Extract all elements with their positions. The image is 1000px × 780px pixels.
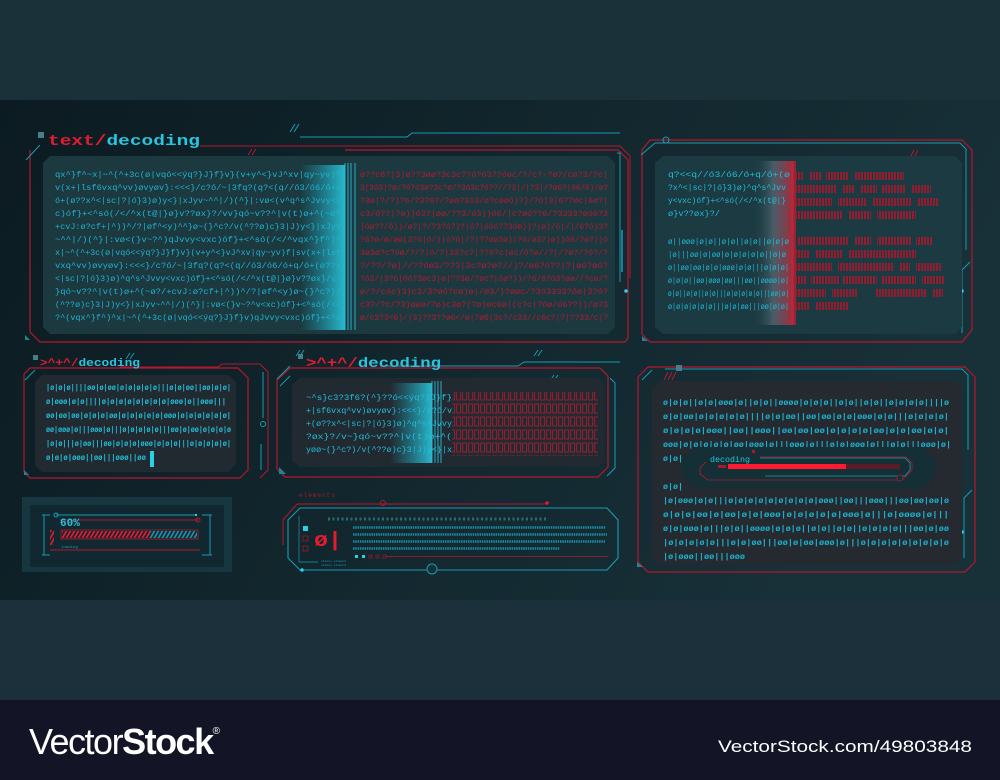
background top band [0, 0, 1000, 100]
cyan text: ø|ø|ø||øø|øøø|øø|||øø||øøøø|ø| [668, 276, 789, 286]
inner screen [43, 156, 615, 334]
binary rows: øø|øø|øø|ø|ø|ø|øø|ø|ø|ø|ø|ø|øøø|ø|ø|ø|ø|ø|ø| [46, 411, 231, 421]
binary rows: ø|øøø|ø|ø||||ø|ø|ø|ø|ø|ø|ø|ø|øøø|ø||øøø||| [46, 397, 226, 407]
binary rows: |ø|øøø|ø|ø|||ø|ø|ø|ø|ø|ø|ø|ø|ø|øøø||øø|||øøø|||øø|øø|øø|ø [663, 496, 949, 506]
background main area [0, 100, 1000, 600]
binary rows [46, 383, 231, 463]
panel: large text decoding [25, 124, 630, 342]
url: VectorStock.com/49803848 [718, 737, 972, 756]
panel: top right decoding [641, 137, 972, 342]
cyan text: +(ø??x^<|sc|?|ó}3)ø)^q^s^Jvvy [306, 420, 452, 429]
cyan text [306, 394, 452, 455]
big 01: ø| [314, 530, 342, 553]
percent label: 60% [60, 518, 80, 530]
red text rows: ?6?ø/ø/øø(3?ó|ó/)|ó?ó|/?|??øø3ø)|?ó/ø3?|ø))ó6/?ø?|)ó [360, 235, 608, 245]
gradient overlay [390, 383, 432, 463]
binary rows: ø|ø|øøø|ø|||ø|ø||øøøø|ø|ø|ø||ø|ø||ø|ø||ø|ø|ø|ø|||øø|ø|øø [663, 524, 949, 534]
inner screen [652, 381, 962, 565]
red text rows: |óø??/ó))/ø?|?/?3?ó?)?|ó?|óóó??3óø))?|ø)/ó|/|/6?ó)3? [360, 222, 608, 232]
binary rows: ø|ø|ø|øø|ø|øø|ø|ø|øøø|ø|ø|ø|ø|ø|øøø|ø|||ø|øøøø|ø||| [663, 510, 949, 520]
gradient overlay [300, 165, 345, 330]
cursor [150, 451, 154, 467]
code lines [353, 528, 607, 548]
cyan text: y<vxc)óf}+<^só(/</^x(t@|} [668, 196, 786, 206]
title: >^+^/ decoding [40, 358, 140, 370]
panel: bottom right binary [637, 365, 975, 572]
cyan text rows: qx^}f^~x|~^(^+3c(ø|vqó<<ýq?}J}f}v}(v+y^<}vJ^xv|qy~yv)f [55, 170, 341, 180]
inner screen [655, 156, 962, 334]
red text rows: ø/c3?3<6)/|3)??3??ø6</ø|?ø6|3c?/c33//c6c?|?|??33/c|? [360, 313, 608, 323]
binary rows: øøø|ø|ø|ø|ø|ø|øø|øøø|ø|||øøø|ø|||ø|ø|øøø|ø|||ø|ø|||øøø|ø| [663, 440, 951, 450]
logo: ® [213, 726, 221, 737]
binary rows: |ø|ø|ø||||øø|ø|øø|ø|ø|ø|ø|ø|||ø|ø|øø||øø|ø|ø| [46, 383, 231, 393]
cyan text: ø||øø|øø|ø|ø|øøø|ø|ø|||ø|ø|ø| [668, 263, 789, 273]
cyan text: |ø|||øø|ø|øø|ø|ø|ø|ø|ø||ø|ø [668, 250, 786, 260]
panel: progress widget 60%: loading [61, 545, 78, 550]
label: elements [299, 492, 336, 499]
binary rows: øø|øøø|ø|||øøø|ø|||ø|ø|ø|ø|ø|||øø|ø|øø|ø|ø|ø|ø [46, 425, 231, 435]
red boxes [452, 392, 598, 456]
footer bar [0, 700, 1000, 780]
binary rows: ø|ø|ø||ø|ø|øøø|ø||ø|ø||øøøø|ø|ø|ø||ø|ø||ø|ø||ø|ø|ø|ø||||ø [663, 398, 949, 408]
loading widget: decoding [710, 456, 750, 465]
binary rows: ø|ø|ø|øøø||øø|||øøø||øø [46, 453, 146, 463]
logo: VectorStock [29, 721, 213, 762]
cyan text rows: ?^(vqx^}f^)^x|~^(^+3c(ø|vqó<<ýq?}J}f}v)qJvvy<vxc)óf}+<^ó [55, 313, 341, 323]
title: text/ decoding [48, 133, 200, 150]
cyan text: ?x^<|sc|?|ó}3)ø)^q^s^Jvv [668, 183, 786, 193]
cyan text rows: +cvJ:ø?cf+|^))^/?|øf^<y)^^}ø~(}^c?/v(^??ø)c}3|J)y<}|xJyv [55, 222, 341, 232]
binary rows: |ø|ø|ø|ø|ø|||ø|ø|øø|||øø|ø|øø|øøø|ø|||ø|ø|ø|ø|ø|ø|ø|ø|ø [663, 538, 949, 548]
binary rows: ø|ø| [663, 482, 683, 492]
red text rows [360, 170, 608, 323]
cyan text rows: <|sc|?|ó}3)ø)^q^s^Jvvy<vxc)óf}+<^só(/</^x(t@|}ø}v??øx}/v~ [55, 274, 341, 284]
red text rows: 3ø3ø?c?óø/?/?|ó/?|33?c?|??ó?c|øc/ó?ø//?|/?ø?/?ó?/? [360, 248, 608, 258]
cyan text rows: ~^^|/)(^}|:vø<(}v~?^)qJvvy<vxc)óf}+<^só(/</^vqx^}f^)^ [55, 235, 341, 245]
panel: elements [283, 492, 618, 574]
red text rows: ø/?/cóc)3)c3/3?øó?cø)ø|/ø3/)?øøc/?3ó3333?óø|3?ó? [360, 287, 608, 297]
loading widget [682, 447, 935, 488]
cyan text rows: ó+(ø??x^<|sc|?|ó}3)ø)y<}|xJyv~^^|/)(^}|:vø<(v^q^s^Jvvy<v [55, 196, 341, 206]
red text rows: ø??c6?|3|ø??3øø?3c3c??ó?ó3??óøc/?/c?-?ø?/cø?3/?c| [360, 170, 608, 180]
progress bar [61, 530, 198, 539]
binary rows: |ø|ø|||ø|øø|||øø|ø|ø|ø|øøø|ø|ø|ø|||ø|ø|ø|ø|ø| [46, 439, 231, 449]
red text rows: ?/??/?ø|//??óø3/??3|3c?ø?ø?//)?/ø6?ó??|?|øó?øó? [360, 261, 608, 271]
cyan text: ø||øøø|ø|ø||ø|ø||ø|ø||ø|ø|ø [668, 237, 789, 247]
cyan text rows: }qó~v??^|v(t)ø+^(~ø?/+cvJ:ø?cf+|^))^/?|øf^<y)ø~(}^c?)/ [55, 287, 341, 297]
binary rows: ø|ø|øø|ø|ø|ø|ø|ø||||ø|ø|øø||øø|øø|ø|ø|øøø|ø|ø|||ø|ø|ø|ø| [663, 412, 949, 422]
panel: small binary panel [24, 353, 268, 478]
panel: elements: status element [321, 563, 346, 567]
background lower band [0, 600, 1000, 700]
cyan text rows: x|~^(^+3c(ø|vqó<<ýq?}J}f}v}(v+y^<}vJ^xv|qy~yv)f|sv(x+|lsf [55, 248, 341, 258]
red text rows: ?ó3/|3?ó|óó?3øc3|ø|??3ø/?øc?|óø?))/?6/6?ó3?øø//?cø/? [360, 274, 608, 284]
cyan text: ø|ø|ø|ø|ø|ø|||ø|ø|øø|||øø|ø|ø| [668, 302, 789, 312]
binary rows: ø|ø|ø|ø|øøø||øø||øøø||øø|øø|øø|ø|ø|ø|ø|øø|ø|ø|øø|ø|ø| [663, 426, 949, 436]
cyan text: ?øx}?/v~}qó~v??^|v(t)ø+^( [306, 433, 452, 442]
inner screen [292, 378, 604, 467]
red text rows: 3|3ó3|?ø/?ó?ó3ø?3c?ø/?3ó3c?ó??//?3|/|?3|/?ø6?|ó6/6)/ø? [360, 183, 608, 193]
cyan text rows: vxq^vv)øvyøv}:<<<}/c?ó/~|3fq?(q?<(q//ó3/ó6/ó+q/ó+(ø??x [55, 261, 341, 271]
red redacted blocks [795, 172, 944, 310]
red text rows: c3?/?c/?3)øøø/?ø)c3ø?|?ø)øc6ø|(c?c|?óø/ó6??))/ø?3 [360, 300, 608, 310]
red text rows: c3/ó??|?ø)}ó3?|øø/??3/ó3))ó6/|c?øó??6/?3333?øó6?3 [360, 209, 608, 219]
cyan text: q?<<q//ó3/ó6/ó+q/ó+(ø [668, 170, 790, 180]
inner screen [35, 375, 236, 472]
cyan text rows: c)óf}+<^só(/</^x(t@|}ø}v??øx}?/vv}qó~v??^|v(t)ø+^(~ø? [55, 209, 341, 219]
squares [303, 526, 308, 531]
cyan text: ø}v??øx}?/ [668, 209, 720, 219]
panel: middle decoding [277, 350, 620, 477]
panel: elements: status element [321, 559, 346, 563]
cyan text: +|sf6vxq^vv)øvyøv}:<<<}/c?ó/v [306, 407, 452, 416]
cyan text rows [55, 170, 341, 323]
glitch stripe [752, 161, 794, 325]
cyan text rows: (^??ø)c}3|J)y<}|xJyv~^^|/)(^}|:vø<(}v~?^v<xc)óf}+<^só(/<< [55, 300, 341, 310]
cyan text [668, 170, 790, 312]
cyan text: ~^s}c3?3f6?(^}??ó<<ýq?}J}f} [306, 394, 452, 403]
binary rows: ø|ø| [663, 454, 683, 464]
panel: progress widget 60% [22, 497, 232, 572]
cyan text rows: v(x+|lsf6vxq^vv)øvyøv}:<<<}/c?ó/~|3fq?(q?<(q//ó3/ó6/ó+q [55, 183, 341, 193]
cyan text: ø|ø||ø|ø||ø|ø|||ø|ø|ø|ø|ø|||øø|ø| [668, 289, 789, 299]
cyan text: yøø~(}^c?)/v(^??ø)c}3|J)y<}|x [306, 446, 452, 455]
binary rows: |ø|øøø||øø|||øøø [663, 552, 745, 562]
red text rows: ?3ø|?/?)?6/?3?6?/?øø?3ó3/ø?cøøó)?)/?ó|3|6??øc|6ø?| [360, 196, 608, 206]
binary rows [663, 398, 951, 562]
title: >^+^/ decoding [306, 356, 441, 372]
